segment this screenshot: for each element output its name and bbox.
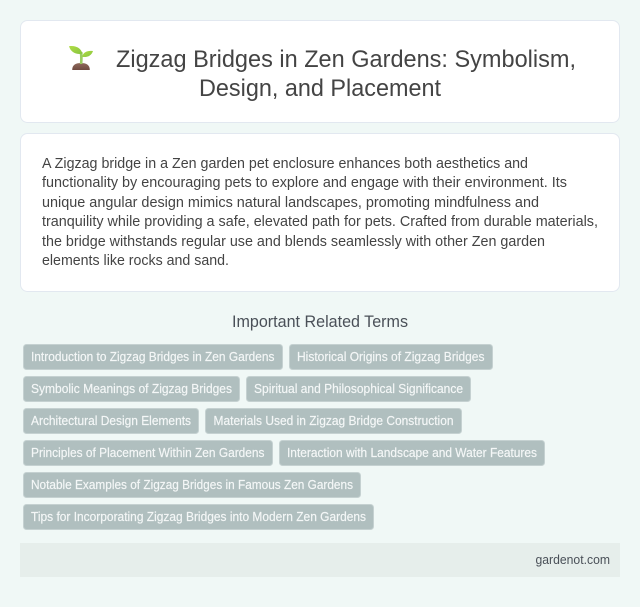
heading: important related terms: Important Related Terms <box>232 313 408 331</box>
description text: functionality by encouraging pets to explore and engage with their environment. Its <box>42 175 567 191</box>
tag: notable examples: Notable Examples of Zigzag Bridges in Famous Zen Gardens <box>31 478 353 492</box>
tag: architectural design: Architectural Design Elements <box>31 414 191 428</box>
title: Design, and Placement <box>199 75 441 102</box>
tag: tips <box>24 504 374 530</box>
description text: unique angular design mimics natural landscapes, promoting mindfulness and <box>42 195 539 211</box>
tag: interaction with landscape: Interaction with Landscape and Water Features <box>287 446 537 460</box>
description text <box>42 156 598 269</box>
footer <box>20 543 620 577</box>
tag: interaction with landscape <box>280 440 544 466</box>
description text: tranquility while providing a safe, elevated path for pets. Crafted from durable materials, <box>42 214 598 230</box>
tag: principles of placement <box>24 440 272 466</box>
footer source text: gardenot.com <box>536 553 610 567</box>
panel: related term tags <box>24 344 544 530</box>
description text: the bridge withstands regular use and blends seamlessly with other Zen garden <box>42 234 545 250</box>
tag: materials <box>206 408 462 434</box>
tag: principles of placement: Principles of Placement Within Zen Gardens <box>31 446 264 460</box>
tag: historical origins <box>290 344 492 370</box>
tag: introduction <box>24 344 282 370</box>
tag: symbolic meanings: Symbolic Meanings of Zigzag Bridges <box>31 382 232 396</box>
tag: introduction: Introduction to Zigzag Bridges in Zen Gardens <box>31 350 274 364</box>
tag: materials: Materials Used in Zigzag Bridge Construction <box>214 414 454 428</box>
tag: tips: Tips for Incorporating Zigzag Bridges into Modern Zen Gardens <box>31 510 366 524</box>
tag: historical origins: Historical Origins of Zigzag Bridges <box>297 350 484 364</box>
title <box>116 46 576 102</box>
tag: spiritual significance: Spiritual and Philosophical Significance <box>254 382 463 396</box>
panel: description <box>20 134 620 292</box>
description text: A Zigzag bridge in a Zen garden pet enclosure enhances both aesthetics and <box>42 156 528 172</box>
tag: spiritual significance <box>246 376 470 402</box>
tag: notable examples <box>24 472 360 498</box>
panel: title header <box>20 20 620 122</box>
icon: seedling <box>69 46 93 70</box>
tag: architectural design <box>24 408 198 434</box>
title: Zigzag Bridges in Zen Gardens: Symbolism, <box>116 46 576 73</box>
description text: elements like rocks and sand. <box>42 253 229 269</box>
tag: symbolic meanings <box>24 376 240 402</box>
